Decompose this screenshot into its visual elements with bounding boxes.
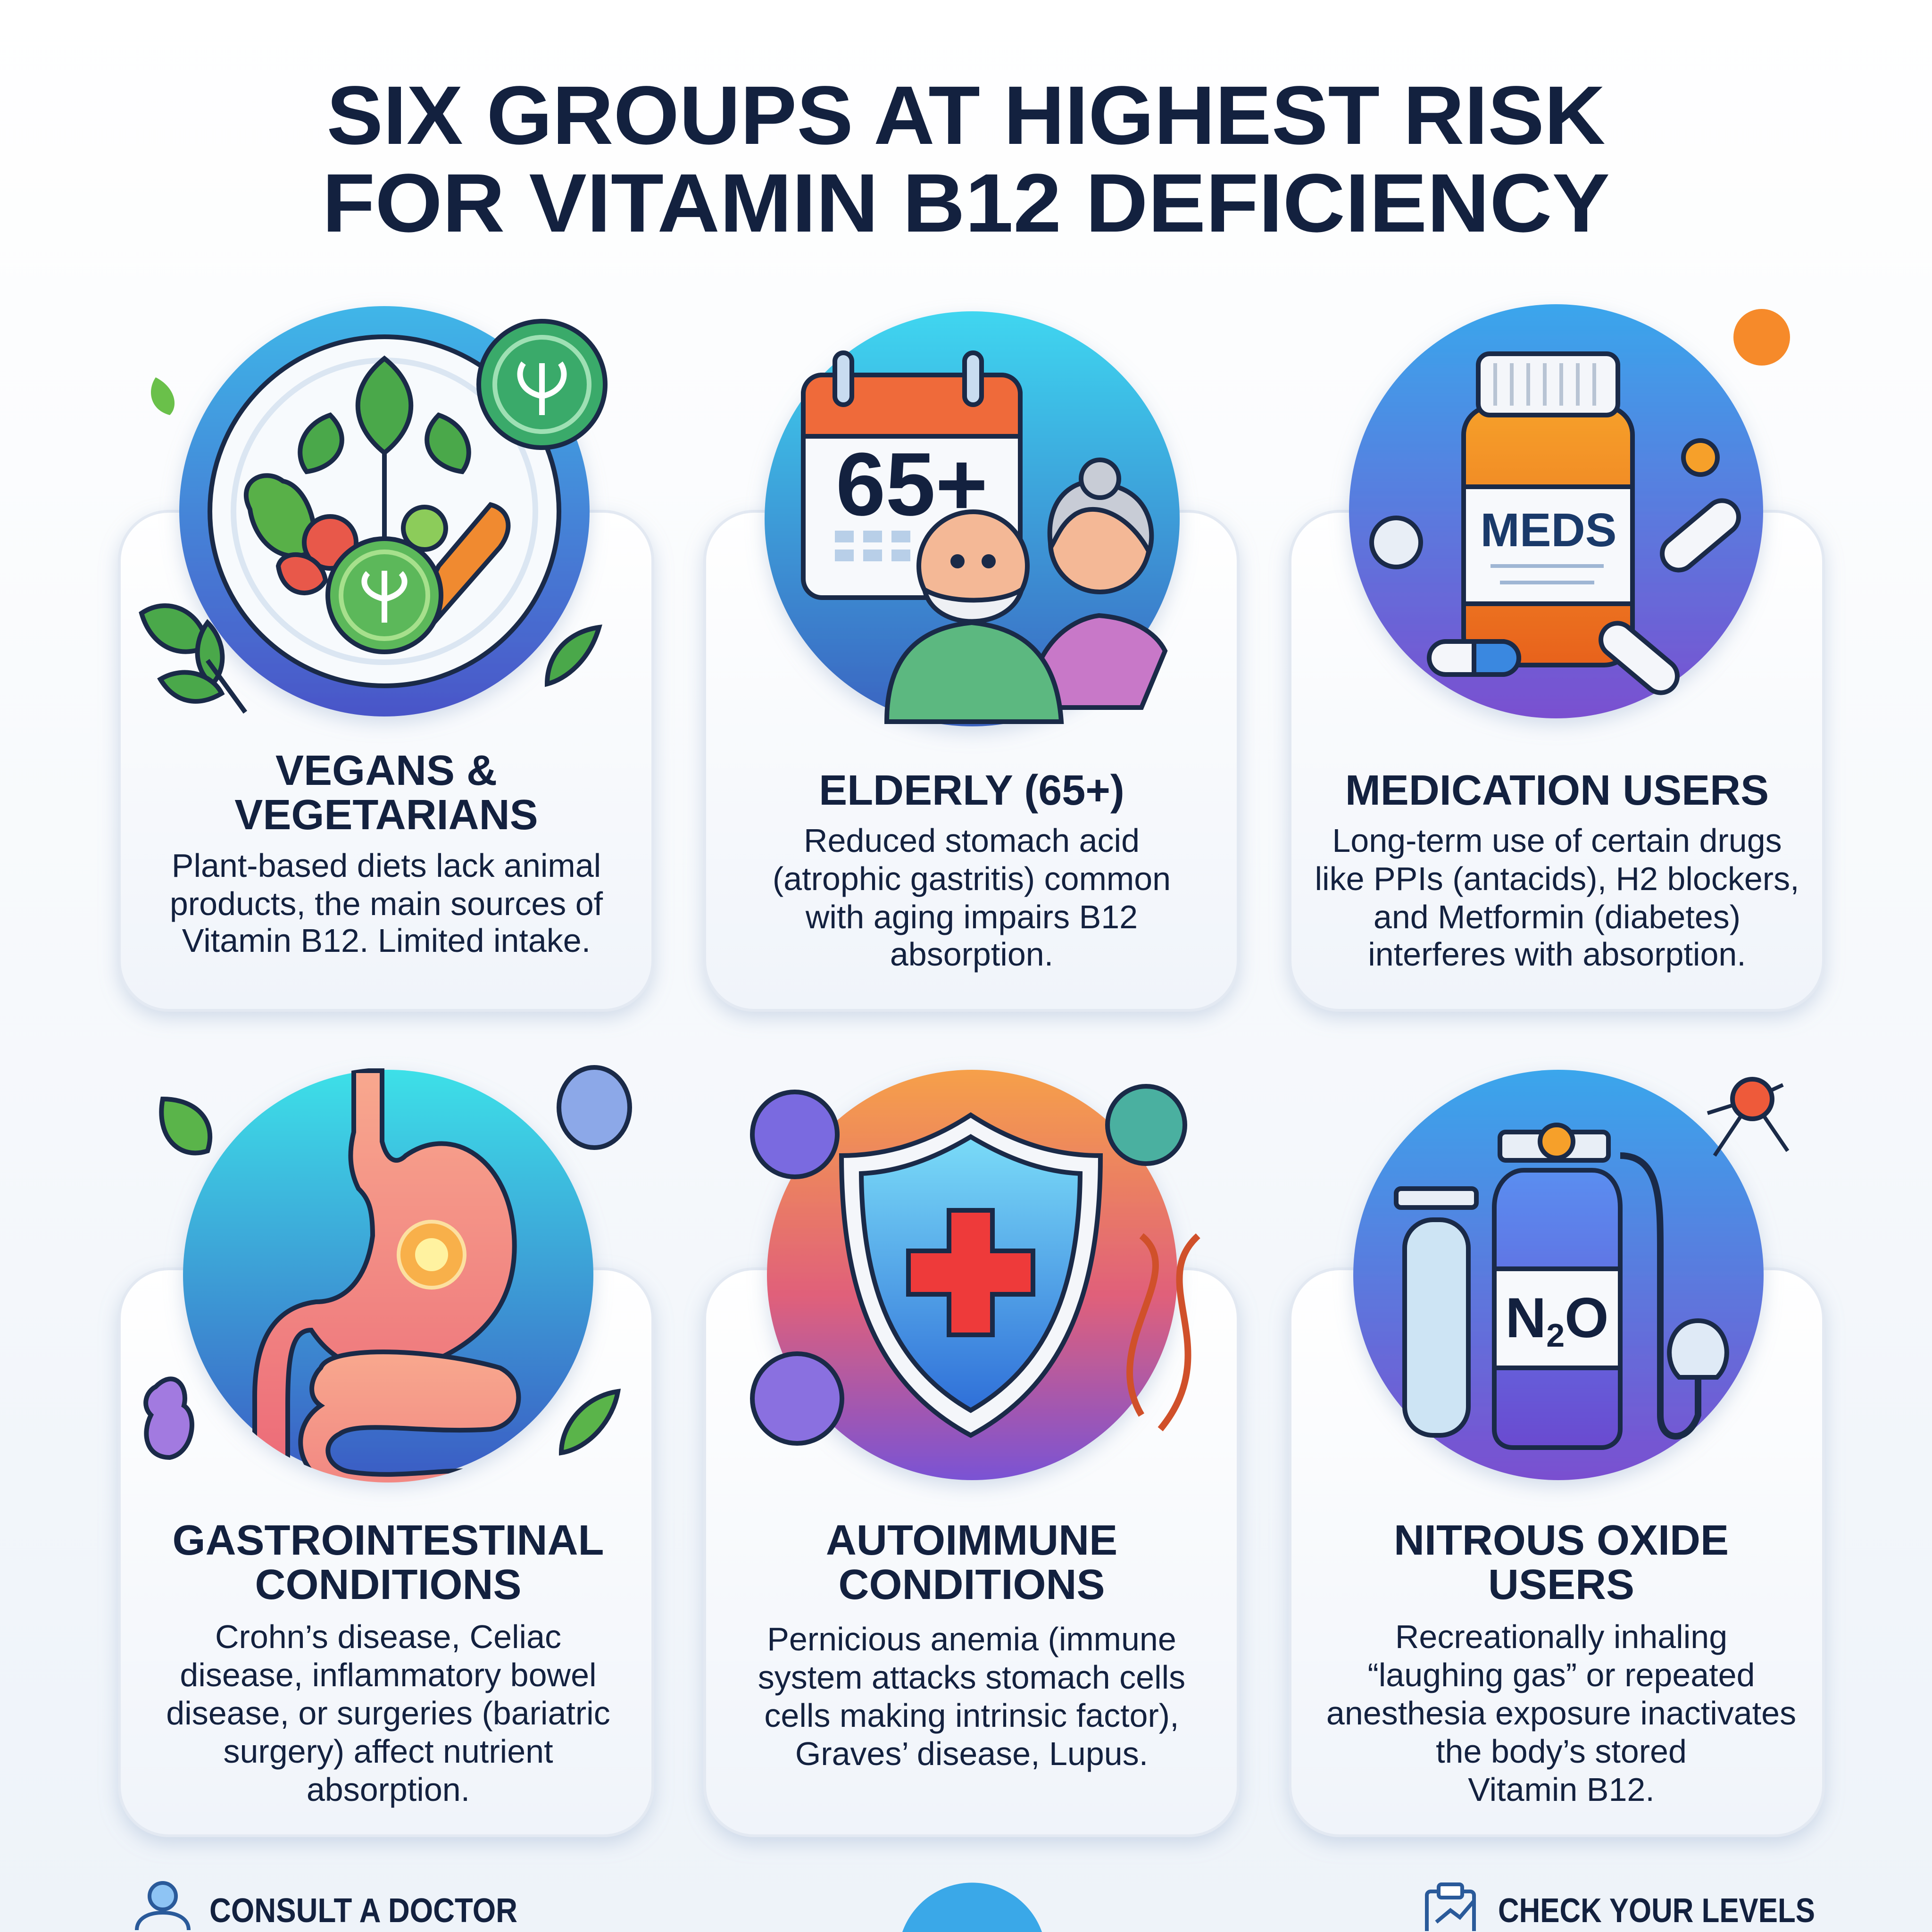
icon: doctor — [137, 1883, 189, 1930]
heading: medication: MEDICATION USERS — [1345, 767, 1769, 814]
panel: medication card — [1290, 511, 1824, 1010]
heading: gastro: CONDITIONS — [255, 1561, 522, 1608]
icon: shield with cross — [752, 1070, 1198, 1480]
heading: gastro — [173, 1517, 604, 1608]
heading: autoimmune: AUTOIMMUNE — [826, 1517, 1117, 1564]
icon: medication bottle: MEDS — [1481, 504, 1616, 557]
icon: clipboard — [1427, 1884, 1474, 1931]
text: autoimmune body: system attacks stomach cells — [758, 1659, 1185, 1696]
heading: autoimmune: CONDITIONS — [838, 1561, 1105, 1608]
text: elderly body: (atrophic gastritis) common — [773, 860, 1171, 897]
text: medication body: interferes with absorption. — [1368, 936, 1746, 973]
heading: vegans — [234, 747, 538, 839]
footer: center badge — [902, 1882, 1042, 1932]
icon: elderly calendar: 65+ — [836, 434, 988, 534]
text: medication body: and Metformin (diabetes) — [1374, 899, 1740, 935]
footer: consult a doctor — [137, 1883, 517, 1930]
text: vegans body: Vitamin B12. Limited intake. — [182, 922, 591, 959]
text: nitrous body: “laughing gas” or repeated — [1367, 1657, 1755, 1693]
text: gastro body: disease, inflammatory bowel — [180, 1657, 597, 1693]
text: gastro body: surgery) affect nutrient — [223, 1733, 553, 1770]
text: elderly body: with aging impairs B12 — [805, 899, 1138, 935]
footer: consult a doctor: CONSULT A DOCTOR — [209, 1892, 517, 1930]
title — [328, 86, 1608, 233]
panel: nitrous card — [1290, 1269, 1824, 1836]
text: medication body — [1315, 822, 1799, 973]
text: autoimmune body: Pernicious anemia (immune — [767, 1621, 1176, 1657]
icon: nitrous oxide tank: N — [1506, 1286, 1546, 1349]
panel: vegans card — [119, 511, 653, 1010]
text: nitrous body: Vitamin B12. — [1468, 1771, 1655, 1808]
text: nitrous body: the body’s stored — [1436, 1733, 1687, 1770]
icon: orange dot — [1733, 309, 1790, 366]
text: vegans body — [170, 847, 603, 959]
text: gastro body: disease, or surgeries (bariatric — [166, 1695, 610, 1732]
panel: elderly card — [705, 511, 1238, 1010]
text: autoimmune body: cells making intrinsic factor), — [764, 1697, 1179, 1734]
heading: gastro: GASTROINTESTINAL — [173, 1517, 604, 1564]
panel: gastro card — [119, 1269, 653, 1836]
text: gastro body: Crohn’s disease, Celiac — [215, 1618, 561, 1655]
footer: check your levels: CHECK YOUR LEVELS — [1498, 1892, 1815, 1930]
text: nitrous body: anesthesia exposure inactivates — [1326, 1695, 1796, 1732]
text: elderly body — [773, 822, 1171, 973]
icon: nitrous oxide tank — [1353, 1070, 1788, 1480]
icon: nitrous oxide tank: O — [1565, 1286, 1608, 1349]
text: nitrous body — [1326, 1618, 1796, 1808]
panel: autoimmune card — [705, 1269, 1238, 1836]
heading: nitrous: NITROUS OXIDE — [1394, 1517, 1729, 1564]
text: vegans body: products, the main sources of — [170, 885, 603, 922]
heading: nitrous: USERS — [1488, 1561, 1634, 1608]
text: elderly body: absorption. — [890, 936, 1053, 973]
text: autoimmune body — [758, 1621, 1185, 1772]
text: nitrous body: Recreationally inhaling — [1395, 1618, 1727, 1655]
icon: vegetable plate — [142, 306, 605, 716]
title: SIX GROUPS AT HIGHEST RISK — [326, 69, 1606, 162]
icon: medication bottle — [1349, 304, 1763, 718]
icon: nitrous oxide tank: 2 — [1546, 1317, 1565, 1354]
text: gastro body: absorption. — [307, 1771, 470, 1808]
heading: autoimmune — [826, 1517, 1117, 1608]
icon: stomach — [146, 1067, 630, 1604]
heading: nitrous — [1394, 1517, 1729, 1608]
text: medication body: like PPIs (antacids), H2 blockers, — [1315, 860, 1799, 897]
icon: elderly calendar — [765, 311, 1180, 726]
heading: elderly: ELDERLY (65+) — [819, 767, 1124, 814]
footer: check your levels — [1427, 1884, 1815, 1931]
text: autoimmune body: Graves’ disease, Lupus. — [795, 1735, 1148, 1772]
heading: vegans: VEGETARIANS — [234, 791, 538, 839]
text: medication body: Long-term use of certain drugs — [1332, 822, 1782, 859]
text: gastro body — [166, 1618, 610, 1808]
heading: vegans: VEGANS & — [275, 747, 497, 794]
text: elderly body: Reduced stomach acid — [804, 822, 1140, 859]
title: FOR VITAMIN B12 DEFICIENCY — [322, 157, 1610, 250]
text: vegans body: Plant-based diets lack animal — [172, 847, 601, 884]
